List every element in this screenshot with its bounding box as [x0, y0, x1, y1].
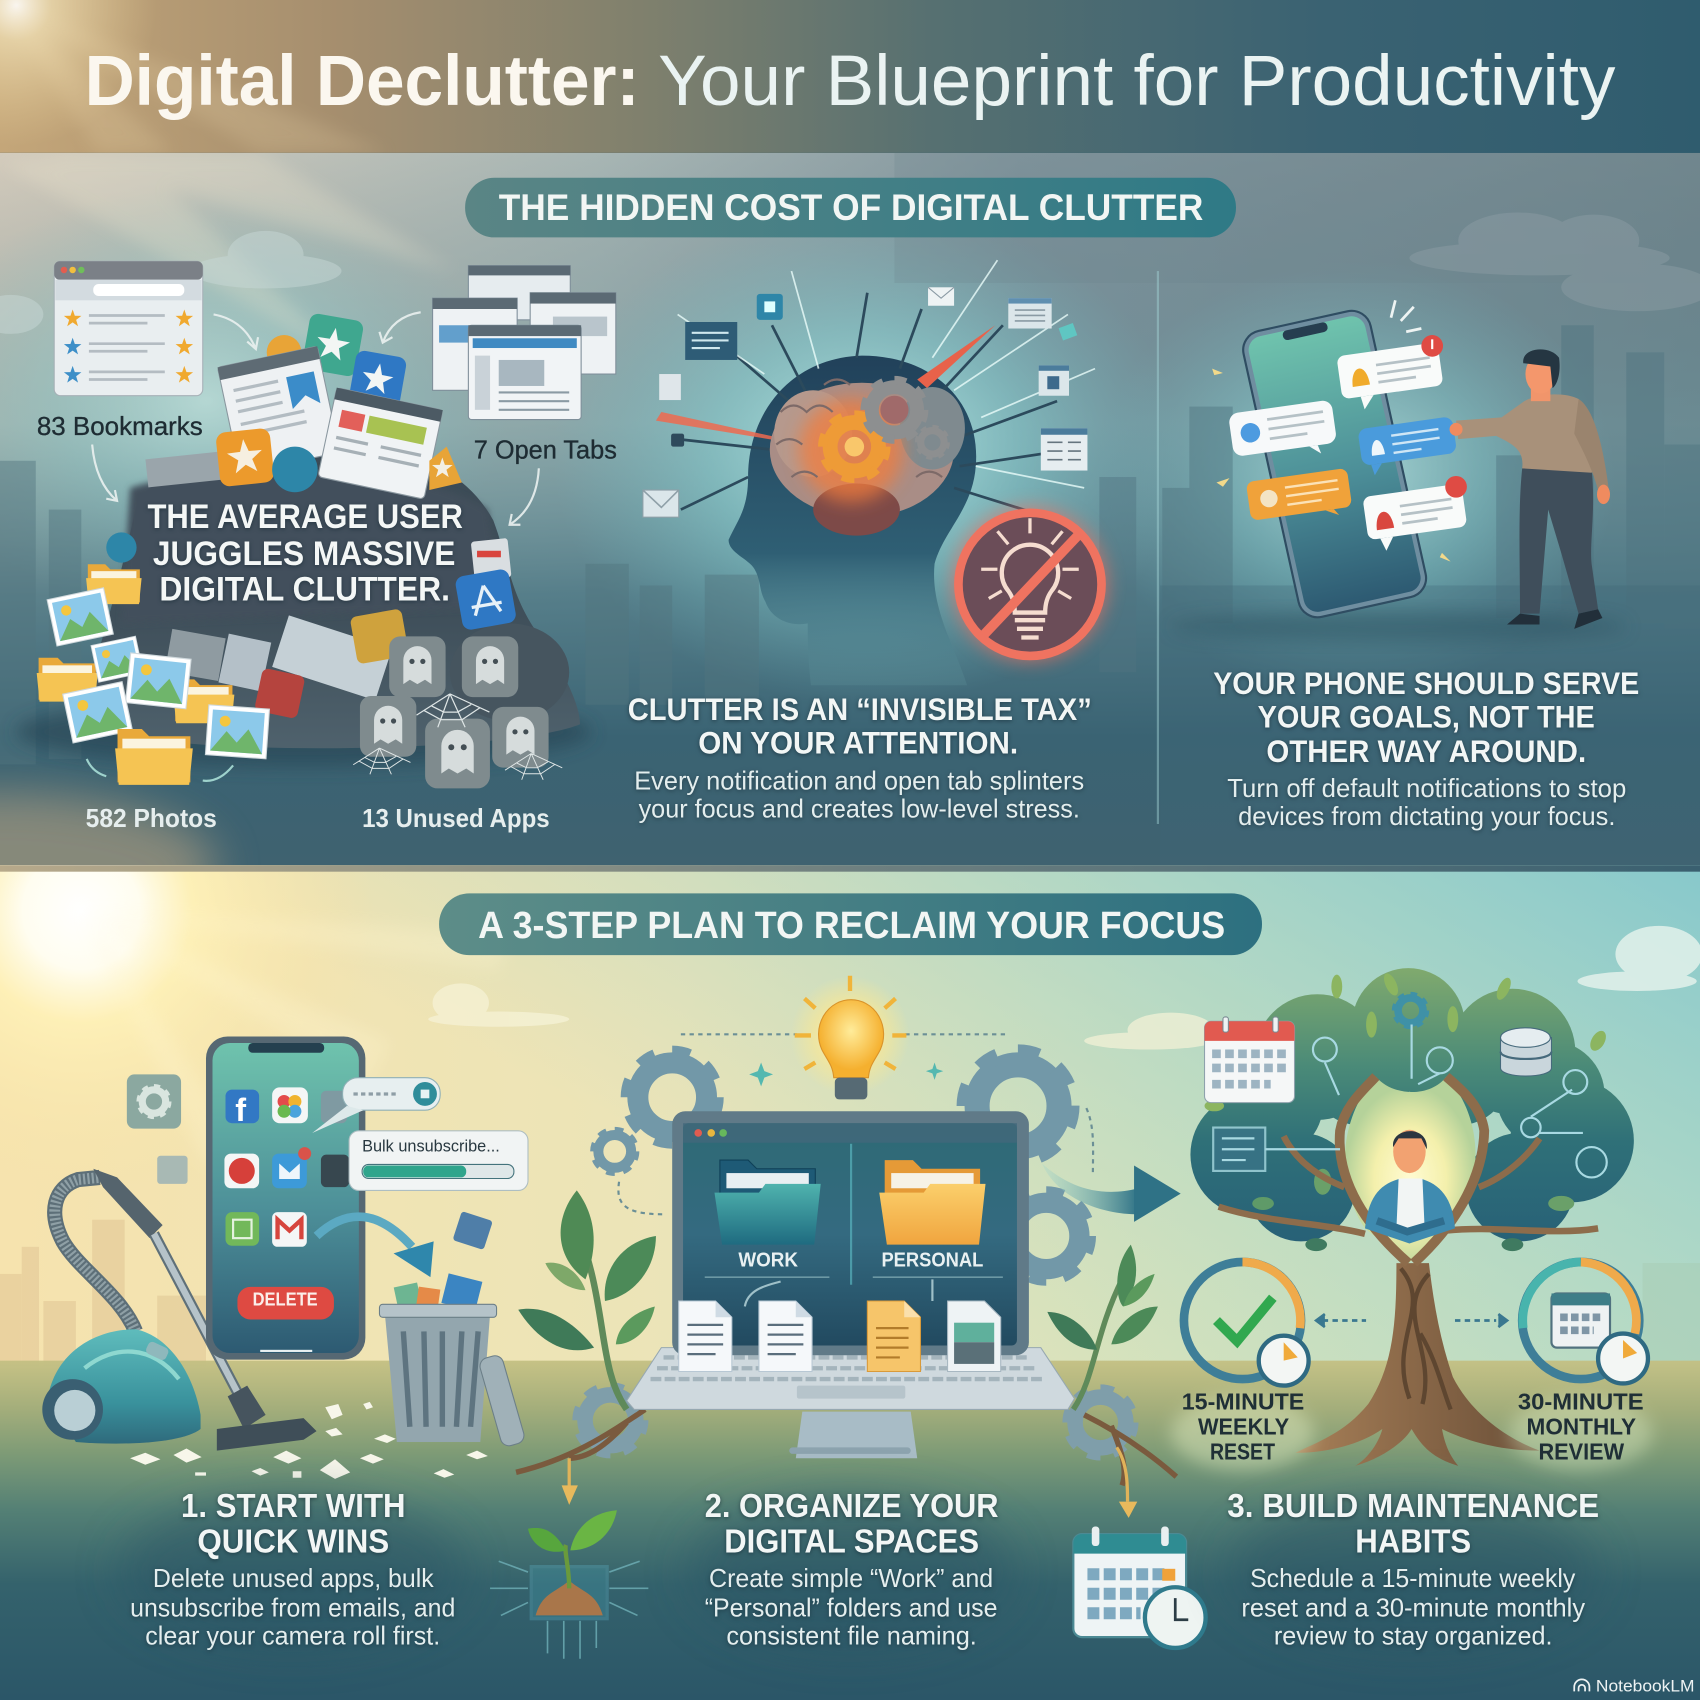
text: phone should serve your goals	[1213, 666, 1639, 831]
step 2 text: DIGITAL SPACES	[724, 1524, 979, 1561]
panel: the hidden cost background	[0, 153, 1700, 943]
section heading: hidden cost	[465, 178, 1236, 237]
icon: calendar	[1205, 1017, 1295, 1103]
clutter pile illustration	[16, 261, 616, 788]
icon: brain	[770, 379, 965, 536]
text: invisible tax: Every notification and open tab splinters	[634, 765, 1084, 795]
icon: lightbulb	[749, 976, 943, 1099]
icon: sprout circuit	[490, 1510, 648, 1659]
clouds	[1409, 212, 1700, 311]
text: average user juggles clutter: THE AVERAGE USER	[147, 498, 463, 536]
step 1 text: Delete unused apps, bulk	[153, 1563, 435, 1593]
canopy	[1190, 968, 1634, 1251]
icon: right plant	[1047, 1245, 1176, 1485]
icon: right side app tiles	[454, 538, 517, 631]
illustration: organize digital spaces	[516, 976, 1176, 1485]
rubble heap	[16, 439, 591, 767]
step 3 text: 3. BUILD MAINTENANCE	[1227, 1488, 1599, 1525]
icon: photo and folder scatter	[37, 532, 269, 785]
icon: glow	[1345, 1077, 1476, 1263]
label: 15-minute weekly reset	[1171, 1388, 1314, 1470]
title	[85, 41, 1616, 121]
arrow: to habits	[1042, 1163, 1181, 1222]
label: 83 bookmarks: 83 Bookmarks	[37, 411, 203, 441]
text: invisible tax	[628, 692, 1092, 823]
icon: open tab windows	[433, 266, 616, 420]
icon: vacuum cleaner	[42, 1169, 317, 1451]
icon: gears	[577, 1034, 1134, 1456]
icon: settings tile	[127, 1074, 188, 1184]
text: phone should serve your goals: devices from dictating your focus.	[1238, 801, 1615, 831]
text: invisible tax: CLUTTER IS AN “INVISIBLE TAX”	[628, 692, 1092, 727]
label: 582 photos: 582 Photos	[86, 803, 217, 833]
step 1 text	[130, 1488, 455, 1651]
arrow: down to calendar	[1117, 1447, 1137, 1518]
delete button	[237, 1287, 334, 1319]
text: average user juggles clutter: JUGGLES MASSIVE	[153, 535, 455, 573]
title: Your Blueprint for Productivity	[658, 41, 1616, 121]
skyline	[0, 1220, 206, 1366]
skyline right	[1100, 326, 1700, 590]
section heading: 3-step plan: A 3-STEP PLAN TO RECLAIM YOUR FOCUS	[478, 905, 1225, 947]
step 1 text: QUICK WINS	[197, 1524, 389, 1561]
illustration: head with splintered focus	[643, 260, 1108, 685]
label: 7 open tabs: 7 Open Tabs	[474, 435, 617, 465]
icon: database	[1501, 1028, 1551, 1076]
label: 30-minute monthly review	[1509, 1388, 1652, 1470]
icon: trunk and roots	[1219, 1077, 1598, 1466]
arrows around pile	[92, 312, 539, 525]
step 3 text	[1227, 1488, 1599, 1651]
bulk unsubscribe popup: Bulk unsubscribe...	[362, 1137, 500, 1155]
icon: center junk	[165, 608, 409, 719]
step 2 text: consistent file naming.	[726, 1621, 977, 1651]
icon: monitor and laptop	[627, 1111, 1074, 1458]
icon: crossed-out lightbulb	[952, 506, 1108, 662]
step 3 text: HABITS	[1355, 1524, 1471, 1561]
step 2 text: 2. ORGANIZE YOUR	[705, 1488, 999, 1525]
label: 30-minute monthly review: REVIEW	[1538, 1438, 1625, 1464]
arrows: dashed between rings	[1316, 1314, 1507, 1327]
text: phone should serve your goals: YOUR PHONE SHOULD SERVE	[1213, 666, 1639, 701]
text: phone should serve your goals: OTHER WAY AROUND.	[1266, 734, 1586, 769]
label: 15-minute weekly reset: 15-MINUTE	[1182, 1388, 1304, 1414]
rays	[678, 293, 1068, 515]
text: phone should serve your goals: Turn off default notifications to stop	[1227, 773, 1626, 803]
label: 13 unused apps: 13 Unused Apps	[362, 803, 550, 833]
icons: network nodes	[1213, 994, 1607, 1177]
step 3 text: review to stay organized.	[1274, 1621, 1553, 1651]
text: phone should serve your goals: YOUR GOALS, NOT THE	[1258, 699, 1595, 734]
step 2 text	[705, 1488, 999, 1651]
text: invisible tax: ON YOUR ATTENTION.	[698, 726, 1018, 761]
label: 30-minute monthly review: MONTHLY	[1527, 1413, 1636, 1439]
icon: weekly reset ring	[1184, 1262, 1309, 1386]
icon: person dismissing notifications	[1450, 349, 1610, 629]
panel: 3-step plan background	[0, 865, 1700, 1584]
title: Digital Declutter:	[85, 41, 640, 121]
icon: monthly review ring	[1522, 1262, 1648, 1383]
text: average user juggles clutter: DIGITAL CLUTTER.	[159, 571, 450, 609]
icon: calendar with clock	[1073, 1527, 1206, 1648]
step 2 text: Create simple “Work” and	[709, 1563, 993, 1593]
text: invisible tax: your focus and creates low-level stress.	[639, 793, 1080, 823]
header band	[0, 0, 1427, 153]
step 1 text: 1. START WITH	[181, 1488, 405, 1525]
section heading: 3-step plan	[439, 893, 1262, 955]
icon: trash can	[379, 1273, 526, 1448]
illustration: phone with notifications	[1171, 300, 1626, 642]
icon: phone	[1239, 307, 1430, 621]
icon: work folder: WORK	[738, 1248, 798, 1271]
step 2 text: “Personal” folders and use	[705, 1593, 997, 1623]
label: 15-minute weekly reset: RESET	[1210, 1438, 1275, 1464]
icon: left plant	[516, 1190, 656, 1472]
text: average user juggles clutter	[147, 498, 463, 609]
step 3 text: reset and a 30-minute monthly	[1241, 1593, 1585, 1623]
icons: floating notifications	[643, 287, 1087, 517]
icon: bookmarks window	[54, 261, 203, 396]
icon: work folder	[714, 1160, 821, 1271]
icon: person	[1365, 1130, 1455, 1244]
label: 15-minute weekly reset: WEEKLY	[1198, 1413, 1289, 1439]
text halos	[119, 1496, 1597, 1648]
illustration: maintenance tree	[1184, 968, 1648, 1466]
icons: documents	[679, 1301, 1001, 1371]
section heading: hidden cost: THE HIDDEN COST OF DIGITAL CLUTTER	[499, 187, 1203, 228]
step 1 text: clear your camera roll first.	[145, 1621, 440, 1651]
icon: ghost apps	[353, 636, 562, 788]
clouds	[428, 983, 1214, 1049]
delete button: DELETE	[253, 1288, 318, 1309]
illustration: quick wins	[42, 1036, 528, 1479]
speech bubble	[312, 1078, 440, 1133]
arrow to trash	[317, 1217, 434, 1277]
arrow: down to sprout	[562, 1458, 578, 1505]
skyline left	[0, 461, 759, 764]
icon: personal folder: PERSONAL	[881, 1248, 983, 1271]
icon: head silhouette	[729, 356, 976, 685]
paper scraps	[130, 1402, 488, 1479]
icon: phone with apps: f	[235, 1092, 246, 1128]
icon: gears	[823, 380, 948, 478]
notebooklm watermark: NotebookLM	[1596, 1676, 1695, 1695]
icon: notification bubbles	[1212, 300, 1469, 562]
icon: app and browser pile top	[145, 312, 462, 499]
icon: personal folder	[879, 1160, 986, 1271]
bulk unsubscribe popup	[349, 1131, 528, 1190]
icon: phone with apps	[206, 1036, 365, 1360]
step 1 text: unsubscribe from emails, and	[130, 1593, 455, 1623]
step 3 text: Schedule a 15-minute weekly	[1250, 1563, 1575, 1593]
label: 30-minute monthly review: 30-MINUTE	[1518, 1388, 1644, 1414]
